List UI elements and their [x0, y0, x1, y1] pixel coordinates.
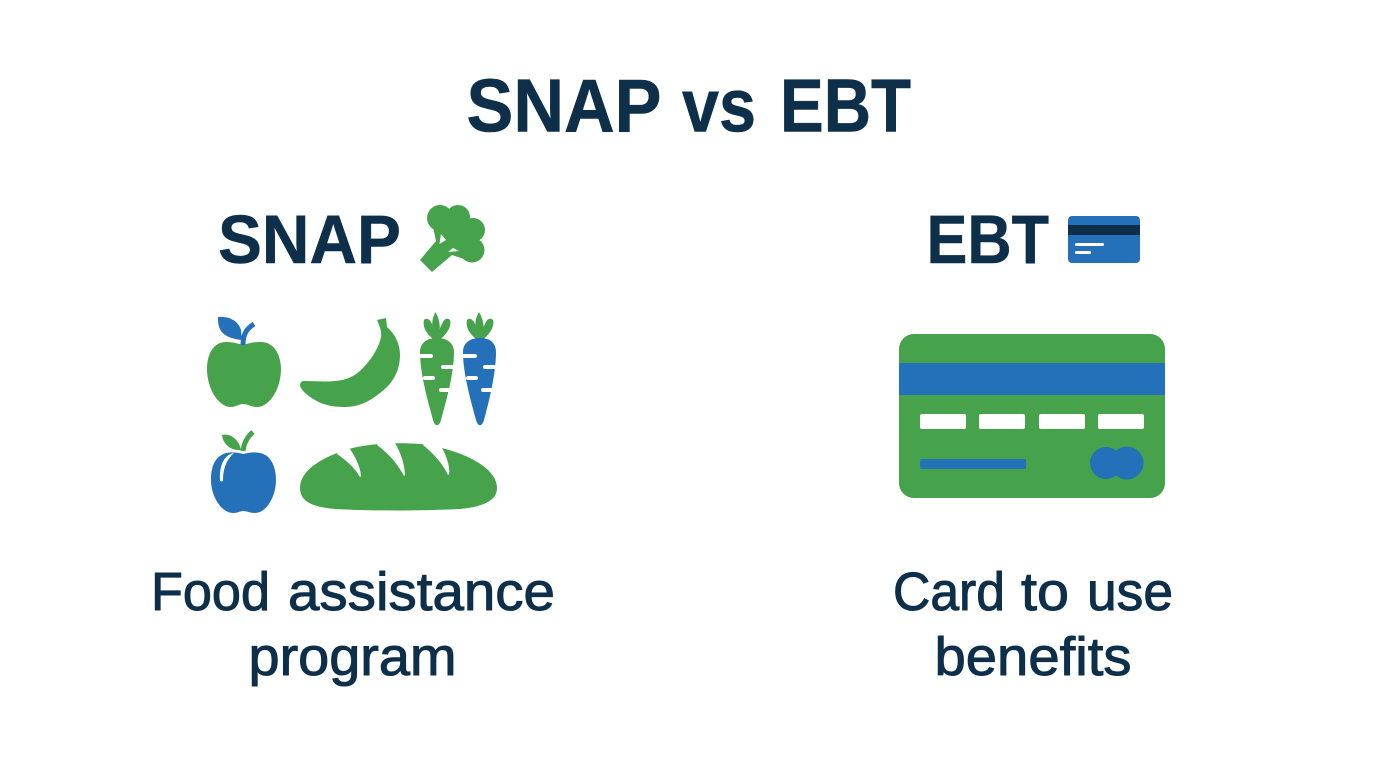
- icon: bread loaf: [300, 438, 497, 510]
- title: SNAP: [466, 64, 662, 148]
- text: Food assistance program: [151, 562, 555, 687]
- heading: EBT: EBT: [926, 201, 1049, 278]
- panel: SNAP: [151, 201, 555, 687]
- icon: banana: [300, 318, 400, 407]
- title: [466, 64, 911, 148]
- icon: blue apple: [211, 432, 276, 513]
- text: Card to use benefits: Card: [893, 562, 1005, 622]
- title: vs: [682, 64, 756, 148]
- icon: blue carrot: [461, 312, 498, 425]
- icon: small blue card: [1068, 216, 1140, 263]
- text: Food assistance program: Food: [151, 562, 270, 622]
- icon: large green card: [899, 334, 1165, 498]
- text: Card to use benefits: to: [1021, 562, 1069, 622]
- heading: SNAP: SNAP: [218, 201, 401, 278]
- text: Food assistance program: assistance: [288, 562, 555, 622]
- panel: EBT: [893, 201, 1173, 687]
- icon: green carrot: [418, 312, 456, 425]
- text: Card to use benefits: use: [1087, 562, 1173, 622]
- icon: green apple: [207, 317, 281, 407]
- text: Card to use benefits: benefits: [934, 627, 1132, 687]
- icon: broccoli: [420, 205, 485, 272]
- text: Food assistance program: program: [248, 627, 456, 687]
- text: Card to use benefits: [893, 562, 1173, 687]
- title: EBT: [780, 64, 911, 148]
